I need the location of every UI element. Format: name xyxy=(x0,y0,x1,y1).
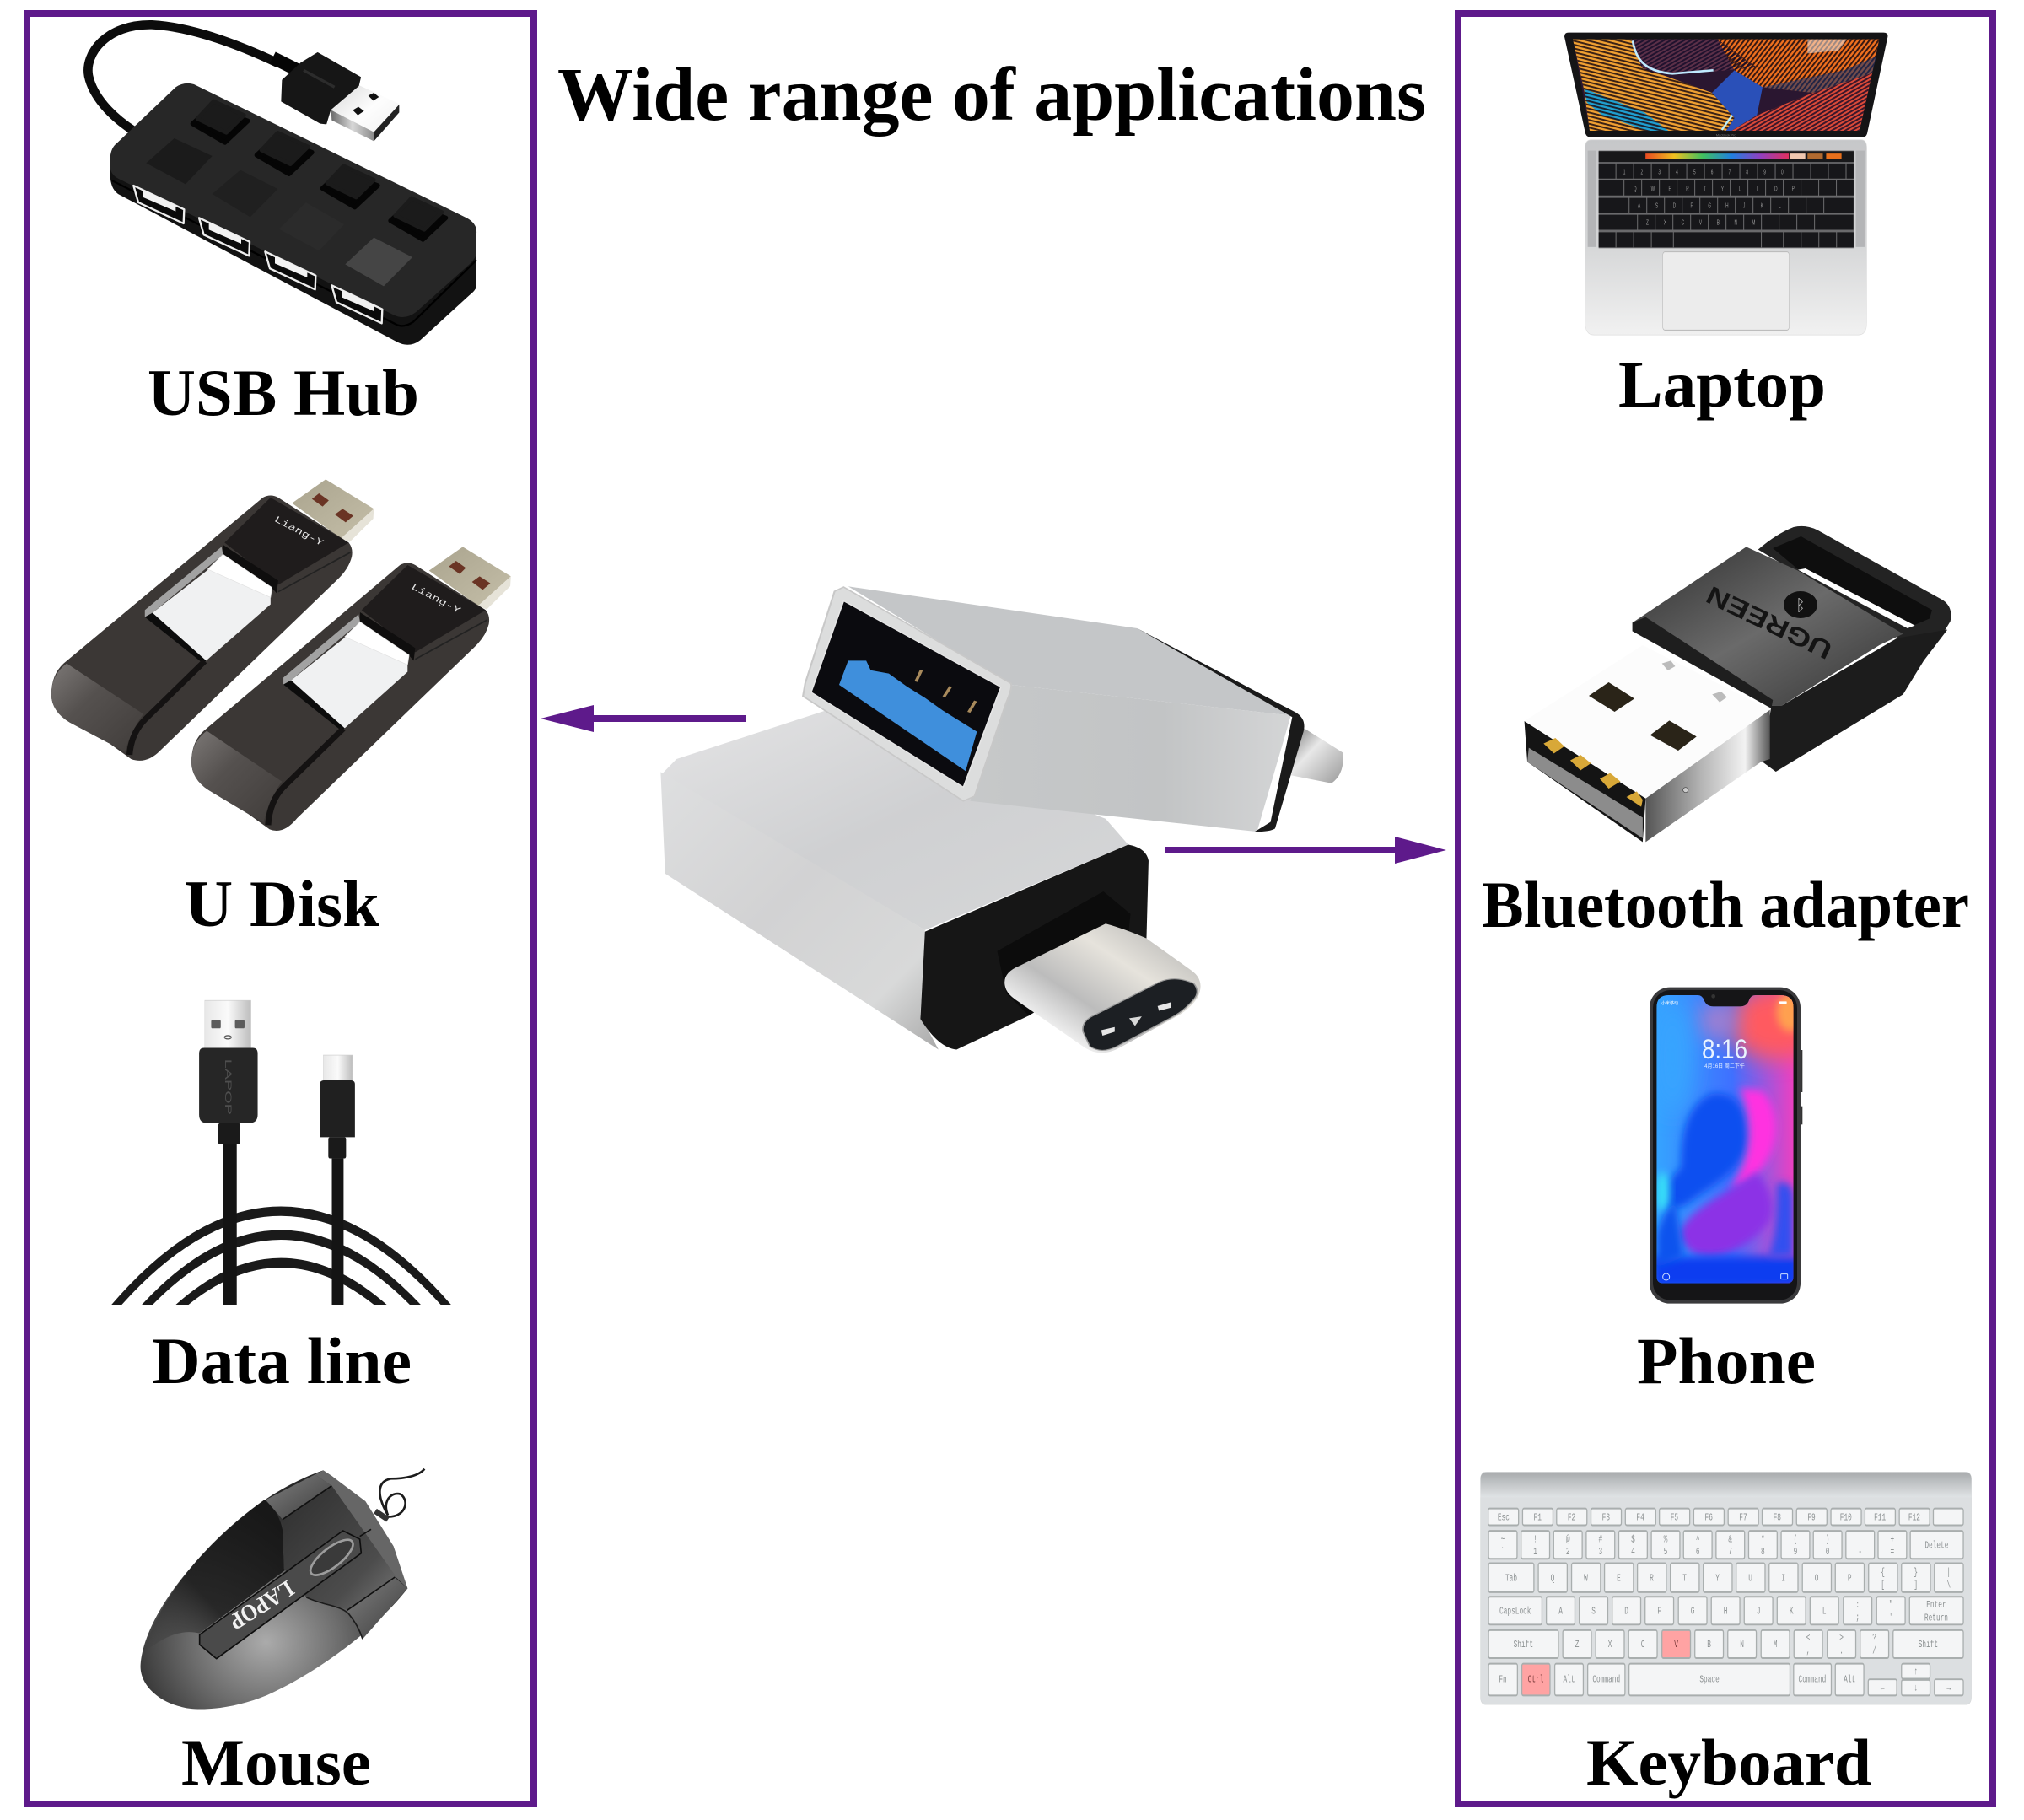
key legends: → xyxy=(1946,1683,1951,1694)
laptop screen: MacBook Pro xyxy=(1716,132,1736,137)
key legends: F7 xyxy=(1739,1513,1747,1524)
key legends: P xyxy=(1848,1574,1852,1585)
key legends: J xyxy=(1757,1607,1761,1618)
key legends: < xyxy=(1806,1634,1811,1645)
key legends: / xyxy=(1872,1645,1876,1657)
key legends: F10 xyxy=(1840,1513,1852,1524)
key legends: A xyxy=(1558,1607,1564,1618)
key legends: X xyxy=(1608,1640,1612,1651)
key legends: Command xyxy=(1592,1674,1620,1686)
key legends: O xyxy=(1815,1574,1818,1585)
key legends: Delete xyxy=(1924,1540,1948,1552)
icon: U disks xyxy=(51,479,511,831)
label: Bluetooth adapter: Bluetooth adapter xyxy=(1482,868,1969,941)
key legends: Shift xyxy=(1919,1639,1938,1651)
key legends: L xyxy=(1822,1607,1827,1618)
key legends: 4 xyxy=(1631,1548,1635,1559)
key legends: ' xyxy=(1889,1613,1893,1624)
label: Data line: Data line xyxy=(152,1324,412,1397)
key legends: 6 xyxy=(1696,1548,1700,1559)
key legends: F4 xyxy=(1636,1513,1644,1524)
key legends: % xyxy=(1664,1535,1668,1546)
key legends: G xyxy=(1691,1607,1694,1618)
key legends: ~ xyxy=(1501,1535,1505,1546)
icon: phone xyxy=(1650,987,1803,1304)
key legends: = xyxy=(1891,1548,1894,1559)
key legends: ! xyxy=(1533,1535,1537,1546)
icon: Bluetooth adapter: UGREEN xyxy=(1703,580,1837,664)
key legends: F1 xyxy=(1534,1513,1542,1524)
key legends: @ xyxy=(1566,1534,1570,1546)
arrow: to left panel xyxy=(541,705,746,732)
key legends: 9 xyxy=(1794,1548,1797,1559)
key legends: } xyxy=(1914,1567,1918,1579)
title: Wide range of applications xyxy=(557,53,1426,137)
label: Phone: Phone xyxy=(1637,1324,1816,1397)
central USB-C adapters xyxy=(660,586,1343,1053)
key legends: F9 xyxy=(1807,1513,1816,1524)
label: Keyboard: Keyboard xyxy=(1586,1726,1871,1799)
key legends: ] xyxy=(1914,1580,1918,1591)
key legends: K xyxy=(1790,1607,1794,1618)
label: USB Hub: USB Hub xyxy=(148,356,419,429)
key legends: F8 xyxy=(1774,1513,1781,1524)
key legends: ; xyxy=(1855,1613,1860,1624)
upper adapter xyxy=(803,586,1343,832)
hub ports xyxy=(133,186,382,323)
key legends: Enter xyxy=(1926,1601,1946,1612)
icon: mouse xyxy=(141,1469,424,1710)
key legends: $ xyxy=(1631,1534,1635,1546)
key legends: F2 xyxy=(1568,1513,1575,1524)
icon: phone: 8:16 xyxy=(1702,1034,1747,1064)
key legends: F5 xyxy=(1671,1513,1678,1524)
key legends: 0 xyxy=(1826,1548,1829,1559)
key legends: ? xyxy=(1872,1634,1876,1645)
icon: data cable xyxy=(112,1000,451,1311)
key legends: 2 xyxy=(1566,1548,1570,1559)
key legends: # xyxy=(1598,1535,1602,1546)
key legends: Fn xyxy=(1499,1675,1507,1686)
icon: phone: 4月16日 周二下午 xyxy=(1704,1063,1745,1069)
U disk two: Liang-Y xyxy=(409,583,462,617)
key legends: - xyxy=(1858,1548,1862,1559)
key legends: F xyxy=(1657,1607,1661,1618)
key legends: | xyxy=(1946,1567,1951,1579)
key legends: Esc xyxy=(1498,1513,1510,1524)
U disk two xyxy=(191,547,511,831)
key legends xyxy=(1498,1513,1951,1694)
panel: right devices xyxy=(1458,13,1993,1804)
icon: Bluetooth adapter xyxy=(1525,526,1951,842)
icon: keyboard xyxy=(1481,1473,1972,1704)
U disk one: Liang-Y xyxy=(272,515,326,549)
label: Mouse: Mouse xyxy=(181,1726,371,1799)
key legends: ) xyxy=(1826,1534,1829,1546)
key legends: Command xyxy=(1799,1674,1826,1686)
key legends: N xyxy=(1740,1640,1744,1651)
key legends: Alt xyxy=(1563,1674,1575,1686)
key legends: Q xyxy=(1551,1574,1554,1585)
key legends: Shift xyxy=(1514,1639,1533,1651)
key legends: U xyxy=(1748,1574,1752,1585)
key legends: E xyxy=(1617,1574,1621,1585)
icon: laptop xyxy=(1564,33,1887,335)
U disk one xyxy=(51,479,374,761)
icon: Bluetooth adapter: ᛒ xyxy=(1795,596,1806,615)
hub buttons xyxy=(192,101,446,240)
icon: mouse: LAPOP xyxy=(224,1575,299,1634)
icon: laptop: ASDFGHJKL xyxy=(1638,202,1781,210)
right panel frame xyxy=(1458,13,1993,1804)
laptop screen xyxy=(1564,33,1887,137)
key legends: V xyxy=(1674,1640,1678,1651)
key legends: 3 xyxy=(1598,1548,1602,1559)
key legends: F3 xyxy=(1602,1513,1610,1524)
key legends: T xyxy=(1682,1574,1687,1585)
key legends: 5 xyxy=(1664,1548,1667,1559)
key legends: Ctrl xyxy=(1528,1674,1543,1686)
left panel frame xyxy=(27,13,534,1804)
key legends: ` xyxy=(1501,1545,1505,1559)
key legends: Tab xyxy=(1505,1573,1517,1585)
key legends: . xyxy=(1839,1646,1844,1657)
panel: left devices xyxy=(27,13,534,1804)
key legends: CapsLock xyxy=(1499,1606,1531,1618)
key legends: ↑ xyxy=(1914,1667,1918,1678)
key legends: H xyxy=(1724,1607,1727,1618)
label: Laptop: Laptop xyxy=(1618,347,1826,421)
label: U Disk: U Disk xyxy=(185,867,380,940)
key legends: R xyxy=(1650,1574,1654,1585)
key legends: " xyxy=(1889,1599,1893,1612)
key legends: + xyxy=(1891,1535,1894,1546)
key legends: 8 xyxy=(1761,1548,1765,1559)
key legends: \ xyxy=(1946,1580,1951,1591)
key legends: M xyxy=(1774,1640,1777,1651)
icon: laptop: ZXCVBNM xyxy=(1646,219,1755,227)
key legends: F12 xyxy=(1908,1513,1920,1524)
key legends: 1 xyxy=(1533,1548,1537,1559)
key legends: Z xyxy=(1575,1640,1579,1651)
key legends: 7 xyxy=(1728,1548,1732,1559)
arrow: to right panel xyxy=(1165,837,1446,864)
key legends: & xyxy=(1728,1535,1732,1546)
icon: laptop: QWERTYUIOP xyxy=(1634,186,1795,193)
key legends: W xyxy=(1584,1574,1589,1585)
key legends: ^ xyxy=(1696,1535,1700,1546)
key legends: ← xyxy=(1881,1683,1885,1694)
icon: laptop: 1234567890 xyxy=(1623,169,1784,176)
key legends: F6 xyxy=(1705,1513,1713,1524)
key legends: { xyxy=(1881,1567,1885,1579)
icon: USB hub xyxy=(88,24,476,345)
key legends: Return xyxy=(1924,1613,1948,1624)
icon: data cable: LAPOP xyxy=(223,1059,233,1115)
key legends: S xyxy=(1591,1607,1596,1618)
key legends: I xyxy=(1781,1574,1785,1585)
key legends: ( xyxy=(1794,1534,1797,1546)
key legends: Alt xyxy=(1844,1674,1855,1686)
icon: phone: 小米移动 xyxy=(1661,1000,1678,1006)
key legends: * xyxy=(1761,1534,1765,1546)
key legends: : xyxy=(1855,1601,1860,1612)
key legends: D xyxy=(1624,1607,1628,1618)
key legends: > xyxy=(1839,1634,1844,1645)
key legends: Space xyxy=(1699,1675,1720,1686)
key legends: , xyxy=(1806,1646,1811,1657)
key legends: Y xyxy=(1715,1574,1720,1585)
key legends: _ xyxy=(1858,1535,1863,1546)
lower adapter xyxy=(660,709,1201,1053)
key legends: F11 xyxy=(1874,1513,1886,1524)
key legends: C xyxy=(1641,1640,1644,1651)
key legends: B xyxy=(1707,1640,1711,1651)
key legends: ↓ xyxy=(1914,1683,1918,1694)
key legends: [ xyxy=(1881,1580,1885,1591)
